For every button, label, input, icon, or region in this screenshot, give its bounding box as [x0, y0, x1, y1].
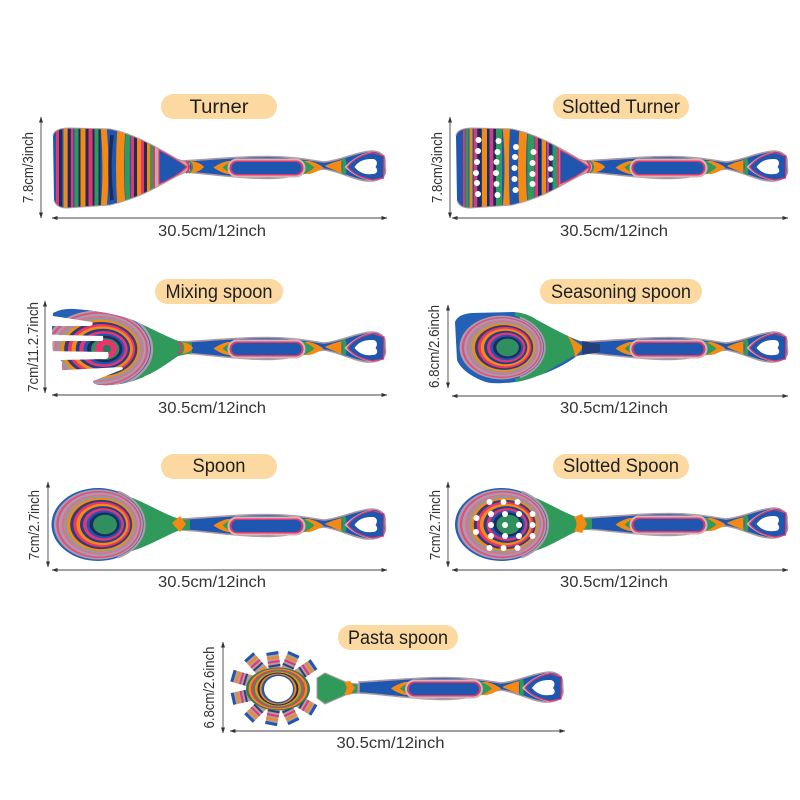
panel: mixing spoon — [52, 279, 386, 386]
turner heading pill — [161, 94, 277, 119]
pasta spoon ring with centre hole — [246, 668, 310, 710]
slotted turner width label: 30.5cm/12inch — [560, 223, 668, 240]
slotted turner height line — [449, 117, 451, 218]
mixing spoon tine gaps — [44, 316, 123, 395]
turner heading pill: Turner — [190, 97, 249, 118]
spoon width label: 30.5cm/12inch — [158, 574, 266, 591]
slotted spoon bowl — [455, 488, 592, 561]
mixing spoon width label: 30.5cm/12inch — [158, 400, 266, 417]
turner height line — [40, 117, 42, 218]
turner blade — [52, 128, 204, 208]
seasoning spoon head — [455, 312, 600, 384]
spoon heading pill — [161, 454, 277, 479]
panel: spoon — [52, 454, 386, 561]
spoon height line — [47, 482, 49, 567]
pasta spoon handle — [359, 672, 563, 702]
slotted spoon width label: 30.5cm/12inch — [560, 574, 668, 591]
spoon width line — [52, 569, 387, 571]
slotted spoon width line — [452, 569, 788, 571]
spoon bowl — [52, 488, 190, 561]
spoon heading pill: Spoon — [192, 456, 246, 477]
slotted spoon height line — [447, 482, 449, 567]
pasta spoon height label: 6.8cm/2.6inch — [202, 646, 218, 728]
turner handle — [182, 151, 386, 181]
pasta spoon neck — [317, 673, 358, 704]
seasoning spoon width label: 30.5cm/12inch — [560, 400, 668, 417]
slotted spoon height label: 7cm/2.7inch — [428, 490, 444, 560]
slotted turner heading pill: Slotted Turner — [562, 97, 681, 118]
panel: slotted spoon dimensions — [428, 482, 788, 591]
pasta spoon heading pill: Pasta spoon — [348, 628, 448, 649]
mixing spoon handle — [182, 332, 386, 362]
slotted turner height label: 7.8cm/3inch — [430, 132, 446, 203]
panel: pasta spoon — [230, 625, 563, 726]
seasoning spoon handle — [584, 332, 788, 362]
seasoning spoon heading pill: Seasoning spoon — [551, 282, 691, 303]
panel: slotted spoon — [455, 454, 788, 561]
pasta spoon width line — [230, 730, 565, 732]
slotted turner holes — [473, 137, 554, 198]
spoon handle — [182, 509, 386, 539]
slotted turner handle — [584, 151, 788, 181]
panel: slotted turner dimensions — [430, 117, 788, 240]
panel: slotted turner — [452, 94, 788, 215]
mixing spoon height line — [44, 301, 46, 393]
slotted spoon heading pill: Slotted Spoon — [563, 456, 679, 477]
slotted spoon holes — [473, 499, 536, 551]
pasta spoon teeth — [230, 651, 317, 726]
turner width line — [52, 217, 387, 219]
panel: seasoning spoon dimensions — [427, 305, 788, 417]
mixing spoon head — [52, 308, 193, 386]
slotted turner width line — [452, 217, 788, 219]
pasta spoon width label: 30.5cm/12inch — [336, 735, 444, 752]
panel: spoon dimensions — [27, 482, 387, 591]
panel: turner dimensions — [21, 117, 387, 240]
turner width label: 30.5cm/12inch — [158, 223, 266, 240]
seasoning spoon height line — [447, 305, 449, 388]
slotted spoon handle — [584, 508, 788, 538]
slotted turner blade — [456, 128, 605, 208]
seasoning spoon height label: 6.8cm/2.6inch — [427, 305, 443, 388]
panel: mixing spoon dimensions — [26, 301, 387, 417]
panel: seasoning spoon — [450, 279, 788, 390]
pasta spoon height line — [222, 642, 224, 733]
seasoning spoon width line — [452, 395, 788, 397]
mixing spoon width line — [52, 394, 387, 396]
spoon height label: 7cm/2.7inch — [27, 490, 43, 560]
turner height label: 7.8cm/3inch — [21, 132, 37, 203]
panel: pasta spoon dimensions — [202, 642, 565, 752]
mixing spoon height label: 7cm/11.2.7inch — [26, 302, 42, 392]
panel: turner — [50, 94, 386, 215]
mixing spoon heading pill: Mixing spoon — [166, 282, 272, 303]
